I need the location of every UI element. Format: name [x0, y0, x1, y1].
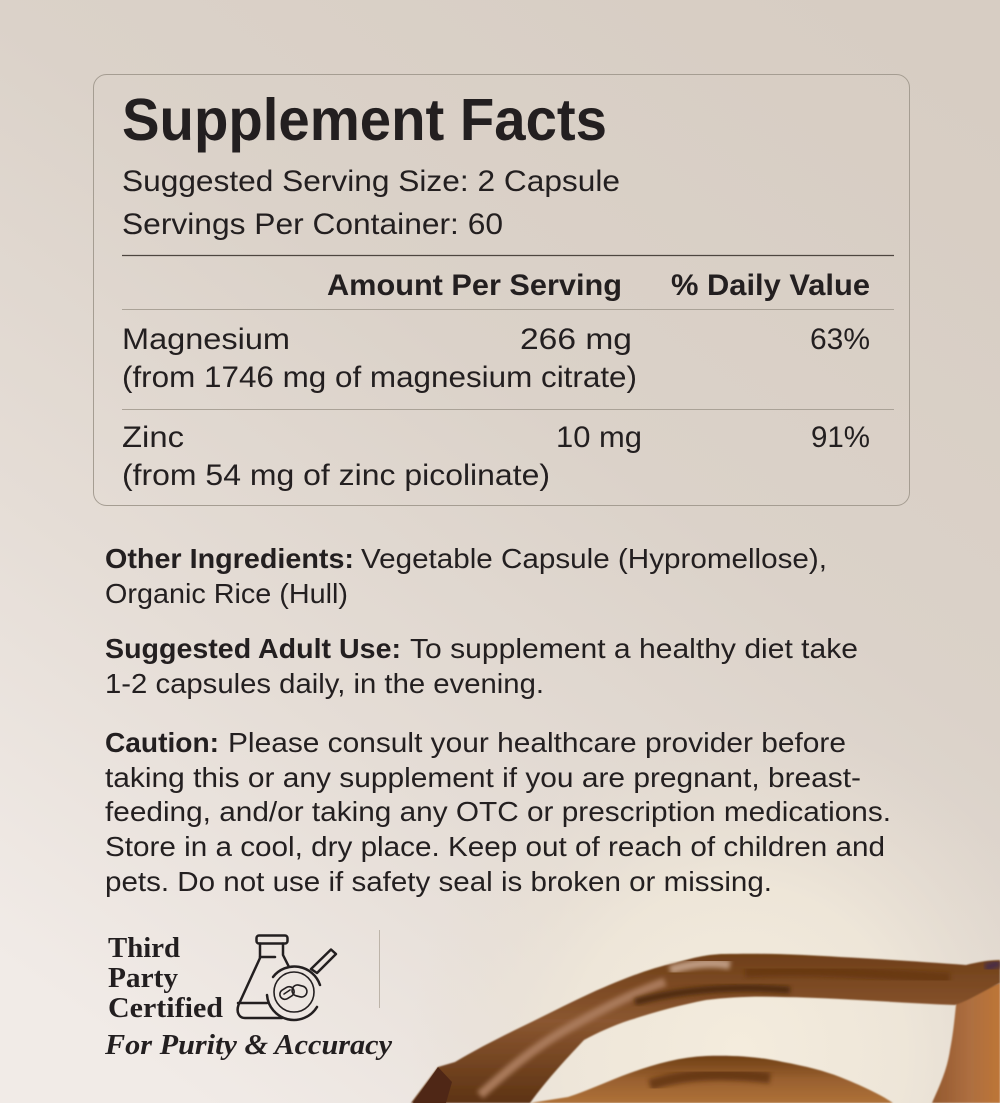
- text: caution: taking this or any supplement if you are pregnant, breast-: [105, 762, 861, 793]
- text: suggested adult use: 1-2 capsules daily, in the evening.: [105, 668, 544, 699]
- heading: Supplement Facts: [122, 87, 607, 153]
- text: caution: [105, 727, 891, 897]
- badge text: Third: [108, 933, 180, 964]
- badge: third party certified: [104, 933, 392, 1061]
- serving size: Suggested Serving Size: 2 Capsule: [122, 165, 620, 198]
- text: caution: Please consult your healthcare provider before: [228, 727, 846, 758]
- text: caution: feeding, and/or taking any OTC or prescription medications.: [105, 796, 891, 827]
- column header: daily value: % Daily Value: [671, 269, 870, 302]
- text: other ingredients: Other Ingredients:: [105, 543, 354, 574]
- text: suggested adult use: To supplement a healthy diet take: [410, 633, 858, 664]
- row: zinc: 91%: [811, 421, 870, 454]
- row: magnesium: Magnesium: [122, 323, 290, 356]
- row: zinc: Zinc: [122, 421, 184, 454]
- badge text: Party: [108, 963, 178, 994]
- icon: flask and magnifier: [238, 936, 336, 1020]
- row: magnesium: [122, 323, 870, 394]
- text: caution: Store in a cool, dry place. Keep out of reach of children and: [105, 831, 885, 862]
- row: zinc: 10 mg: [556, 421, 642, 454]
- panel: supplement facts: [94, 74, 910, 506]
- row: magnesium: 63%: [810, 323, 870, 356]
- text: suggested adult use: Suggested Adult Use:: [105, 633, 401, 664]
- servings per container: Servings Per Container: 60: [122, 208, 503, 241]
- badge text: Certified: [108, 993, 223, 1024]
- tagline: For Purity & Accuracy: [104, 1029, 392, 1061]
- column header: amount: Amount Per Serving: [327, 269, 622, 302]
- text: other ingredients: [105, 543, 827, 609]
- background cream glow: [380, 720, 1000, 1103]
- row: zinc: [122, 421, 870, 492]
- badge text: [108, 933, 223, 1024]
- panel outline: [94, 74, 910, 506]
- text: caution: pets. Do not use if safety seal is broken or missing.: [105, 866, 772, 897]
- text: caution: Caution:: [105, 727, 219, 758]
- text: other ingredients: Vegetable Capsule (Hypromellose),: [361, 543, 827, 574]
- row: magnesium: 266 mg: [520, 323, 632, 356]
- text: other ingredients: Organic Rice (Hull): [105, 578, 348, 609]
- text: suggested adult use: [105, 633, 858, 699]
- row: zinc: (from 54 mg of zinc picolinate): [122, 459, 550, 492]
- row: magnesium: (from 1746 mg of magnesium citrate): [122, 361, 637, 394]
- photo: dried root: [411, 954, 1000, 1103]
